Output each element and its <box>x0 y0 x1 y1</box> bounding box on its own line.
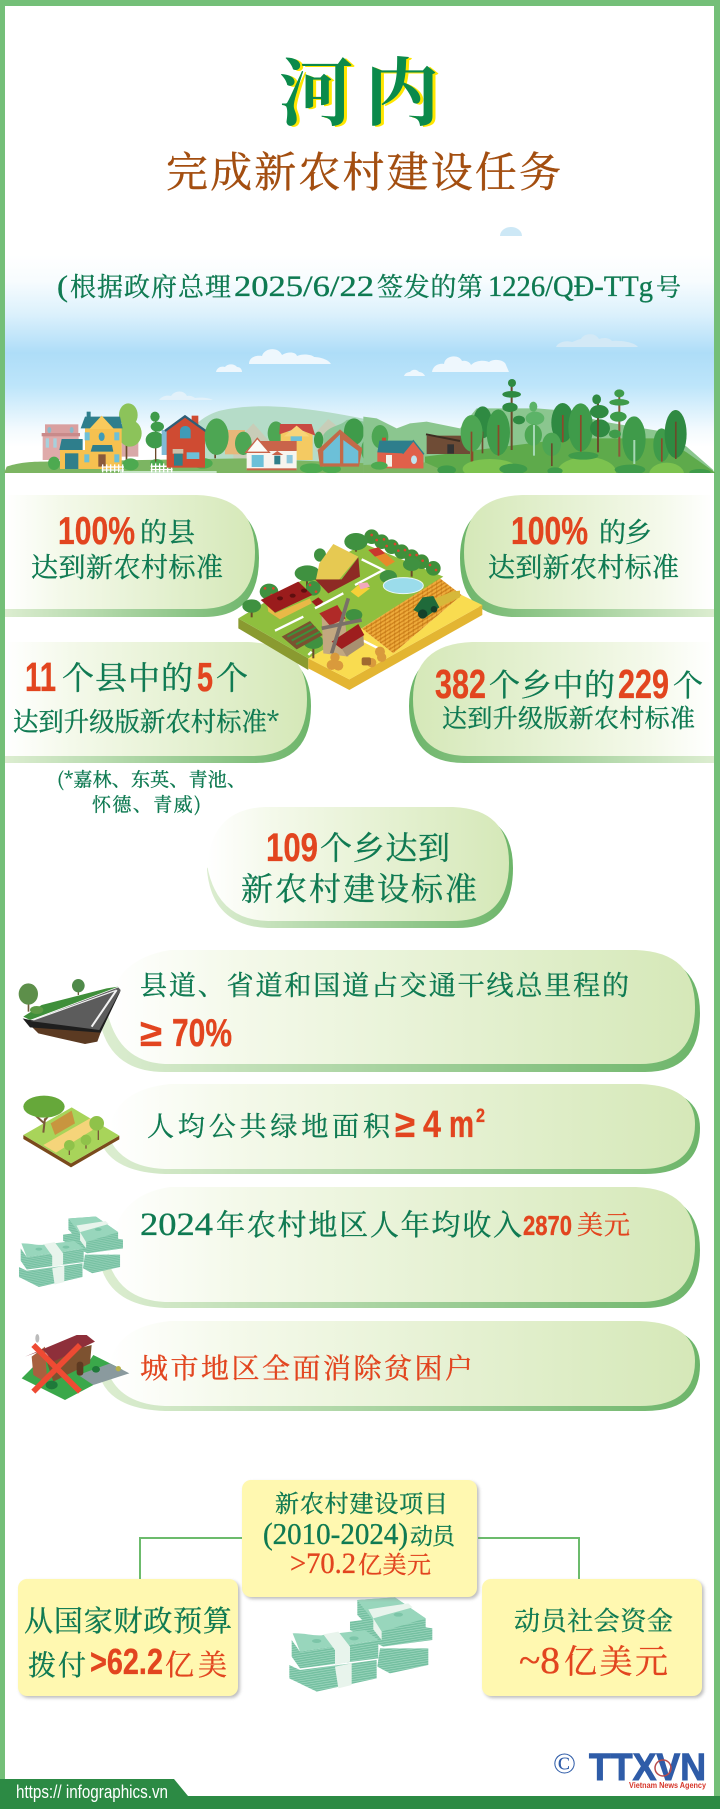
pink house <box>42 424 138 460</box>
box: programme total <box>242 1480 479 1599</box>
decision reference line: 号 <box>656 268 681 304</box>
box text: 从国家财政预算 <box>24 1599 232 1640</box>
clouds <box>159 227 638 400</box>
icon: crossed-out house <box>22 1334 129 1400</box>
panel: 5 of 11 districts <box>5 642 311 763</box>
yellow ground <box>308 595 482 679</box>
small red house <box>371 438 424 470</box>
panel text: 个乡达到 <box>320 823 450 869</box>
panel text: 4 <box>423 1104 441 1146</box>
panel text: 2 <box>476 1106 485 1127</box>
footer bar with url: https:// infographics.vn <box>16 1782 168 1802</box>
red farmhouse <box>261 582 323 619</box>
orchard <box>364 529 441 576</box>
panel text: 达到新农村标准 <box>488 546 679 585</box>
footnote: district list <box>57 765 246 817</box>
box text: 拨付 <box>28 1644 86 1684</box>
box text: 动员社会资金 <box>514 1601 673 1638</box>
box text: 动员 <box>410 1518 457 1551</box>
green tree <box>146 412 168 462</box>
box: state budget <box>18 1579 240 1698</box>
central trees and orange house <box>205 418 371 460</box>
footer bar with url <box>0 1779 720 1809</box>
box text: >62.2 <box>90 1641 163 1682</box>
panel text: ≥ <box>395 1104 415 1146</box>
logo: TTXVN: © <box>553 1747 576 1780</box>
title: 河内 <box>282 36 442 142</box>
panel text: 个 <box>673 661 703 705</box>
connector lines <box>140 1538 579 1579</box>
panel text: 美元 <box>577 1205 630 1242</box>
panel: green space <box>102 1084 700 1174</box>
box text <box>24 1599 232 1684</box>
panel text: 个县中的 <box>62 653 193 699</box>
white house <box>246 438 341 473</box>
left tree <box>372 425 388 448</box>
decision reference line: 签发的第 <box>377 267 483 304</box>
panel text: 2024 <box>140 1207 213 1243</box>
illustration: farm <box>238 529 482 690</box>
logo: TTXVN: Vietnam News Agency <box>629 1781 706 1790</box>
box text: 亿美 <box>165 1643 227 1684</box>
foreground hills <box>437 452 710 473</box>
panel: 100% districts <box>5 495 259 617</box>
panel text <box>147 1104 485 1146</box>
panel text: 100% <box>511 510 588 553</box>
panel text <box>140 964 629 1055</box>
panel text: 城市地区全面消除贫困户 <box>140 1347 473 1387</box>
green ground <box>238 543 443 658</box>
title: 河内 <box>279 35 439 141</box>
panel: poverty elimination <box>102 1321 700 1411</box>
panel: 100% communes <box>460 495 714 617</box>
panel text: 达到升级版新农村标准 <box>442 699 695 735</box>
base sides <box>238 618 308 670</box>
panel text <box>241 823 477 910</box>
decision reference line: ( <box>57 270 68 303</box>
logo: TTXVN: TTXVN <box>589 1747 706 1789</box>
panel text: 个 <box>216 653 248 699</box>
panel text <box>13 653 279 739</box>
decision reference line <box>57 267 681 304</box>
box text <box>514 1601 673 1683</box>
panel text: 229 <box>618 661 669 707</box>
decision reference line: 2025/6/22 <box>234 270 374 303</box>
icon: money <box>19 1216 123 1287</box>
icon: money stacks <box>289 1597 432 1692</box>
box text: (2010-2024) <box>263 1516 408 1551</box>
bushes and fences <box>48 457 213 472</box>
footnote: district list: 怀德、青威) <box>92 790 201 817</box>
panel text: 达到升级版新农村标准* <box>13 702 279 739</box>
barn <box>315 544 360 593</box>
panel text: 达到新农村标准 <box>31 546 223 585</box>
panel text: 的乡 <box>599 511 652 550</box>
panel: 109 communes <box>207 807 513 928</box>
garden beds <box>282 621 323 649</box>
panel text: m <box>449 1104 474 1146</box>
decision reference line: 根据政府总理 <box>70 267 231 304</box>
pond <box>383 578 423 594</box>
box text: >70.2 <box>290 1547 356 1580</box>
red house <box>165 416 207 468</box>
orange machine <box>368 547 395 567</box>
yellow truck <box>351 582 370 597</box>
footnote: district list: (*嘉林、东英、青池、 <box>57 765 246 792</box>
panel text: 109 <box>266 826 318 870</box>
trees <box>461 379 687 466</box>
sky with gradient <box>5 255 714 473</box>
decision reference line: 1226/QĐ-TTg <box>488 270 653 303</box>
glass house <box>318 429 362 467</box>
panel text <box>31 510 223 585</box>
panel: 229 of 382 communes <box>409 642 714 763</box>
right forest <box>363 379 715 473</box>
subtitle: 完成新农村建设任务 <box>166 140 561 200</box>
icon: park <box>23 1096 119 1167</box>
fences <box>275 559 383 655</box>
box text: 亿美元 <box>358 1545 431 1580</box>
crop field <box>362 578 462 653</box>
panel text <box>488 510 679 585</box>
panel text: 人均公共绿地面积 <box>147 1105 391 1144</box>
panel text: ≥ <box>140 1013 162 1055</box>
panel text: 的县 <box>140 511 195 550</box>
box text: 新农村建设项目 <box>275 1484 448 1519</box>
windmill <box>319 598 364 657</box>
hay bales <box>327 647 386 671</box>
panel: road share <box>102 950 700 1072</box>
panel text: 年农村地区人年均收入 <box>216 1203 522 1244</box>
illustration: village and forest <box>4 379 715 473</box>
panel text: 11 <box>25 654 56 700</box>
panel: rural income <box>102 1187 700 1308</box>
left village houses <box>3 403 371 475</box>
yellow house <box>59 412 123 469</box>
panel text <box>435 660 703 735</box>
panel text: 个乡中的 <box>489 660 615 705</box>
panel text: 县道、省道和国道占交通干线总里程的 <box>140 964 629 1003</box>
icon: road <box>19 979 121 1044</box>
tractor <box>413 591 460 619</box>
panel text: 2870 <box>523 1210 572 1241</box>
trees <box>242 533 420 658</box>
panel text: 100% <box>58 510 135 553</box>
panel text: 新农村建设标准 <box>241 864 477 910</box>
box text <box>263 1484 457 1580</box>
light green tree <box>118 403 142 460</box>
wooden cabin <box>426 434 470 454</box>
box text: 亿美元 <box>564 1636 668 1683</box>
panel text: 382 <box>435 661 486 707</box>
box text: ~8 <box>519 1640 560 1682</box>
yellow house with red roof <box>279 424 315 460</box>
panel text <box>140 1203 630 1244</box>
box: social capital <box>482 1579 704 1698</box>
panel text: 5 <box>197 654 213 700</box>
panel text: 70% <box>172 1012 232 1055</box>
